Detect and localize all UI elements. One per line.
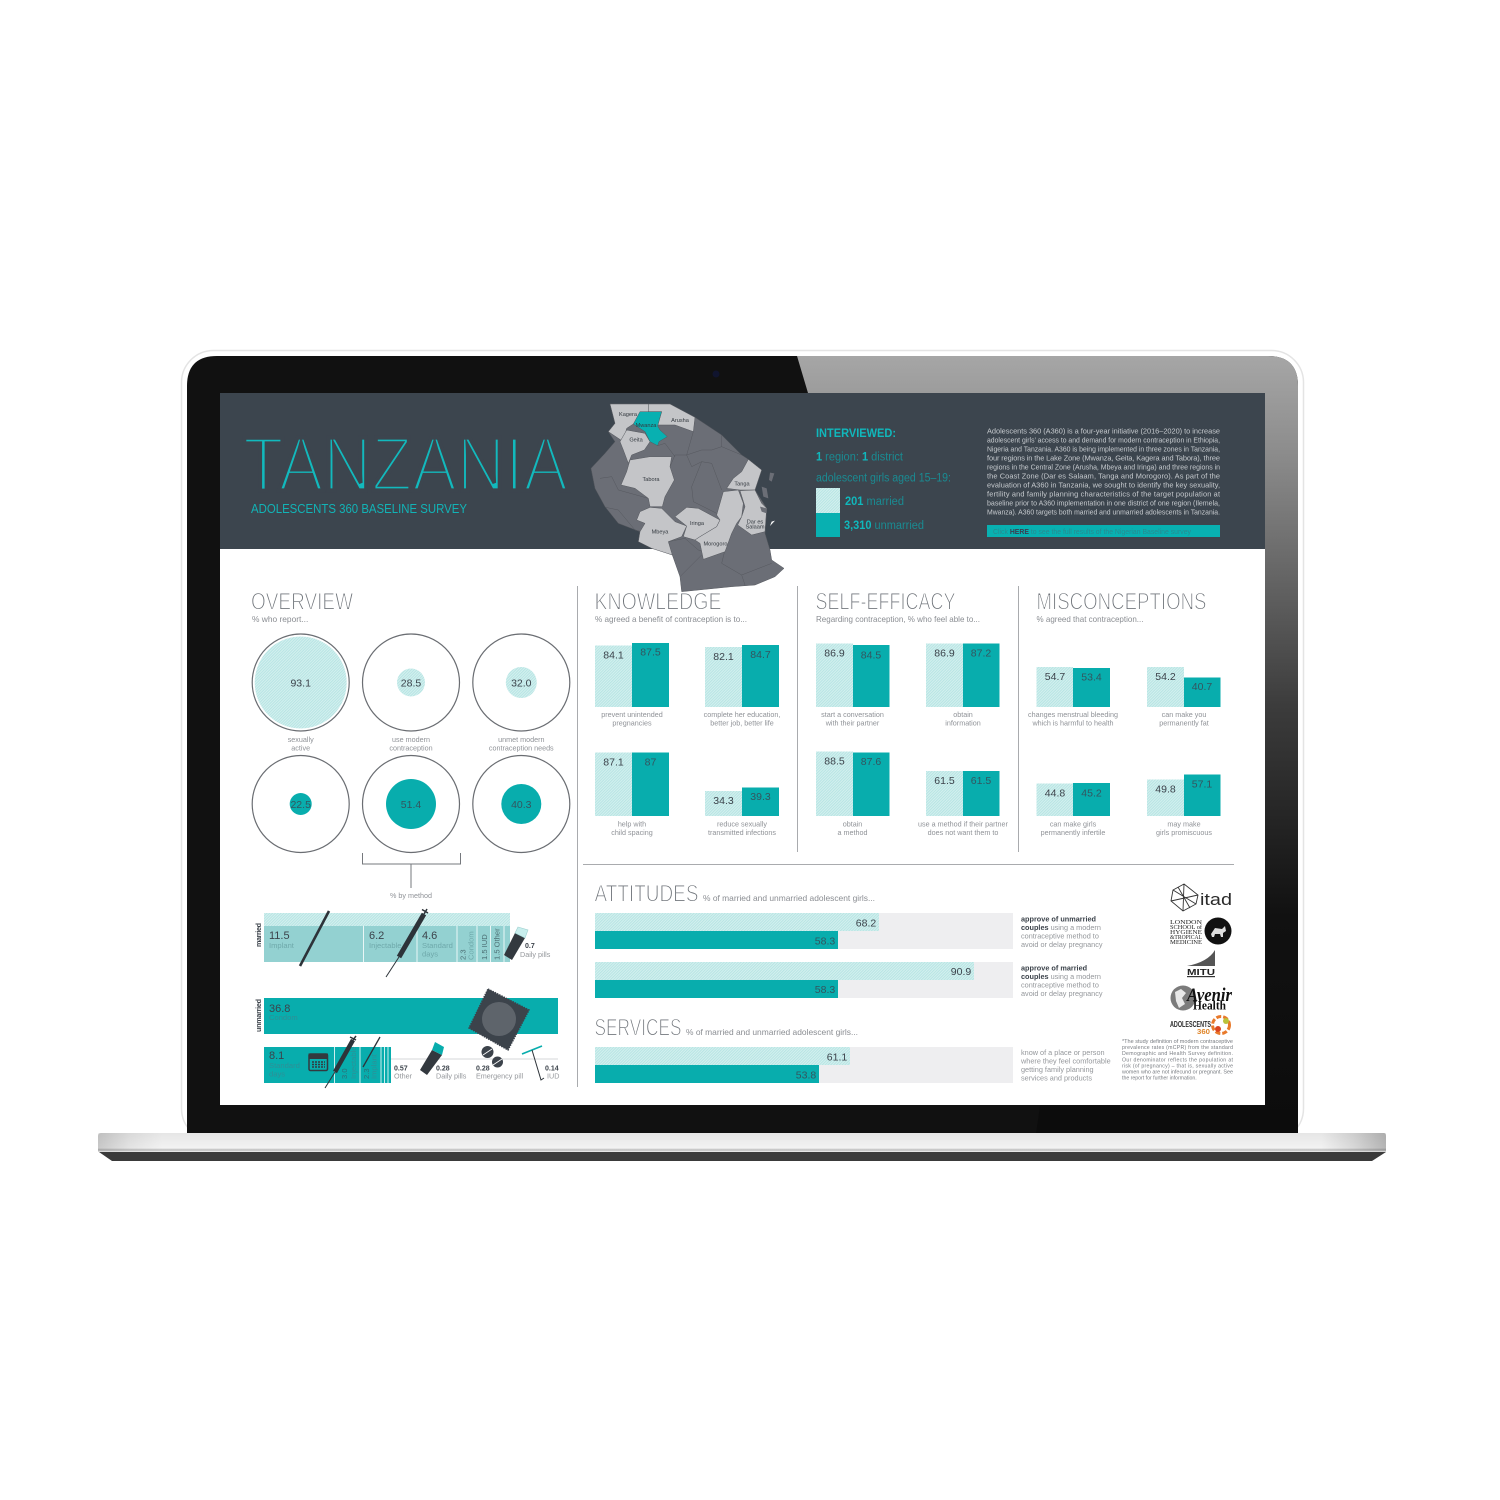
- unmarried swatch: [816, 513, 840, 537]
- logo: Avenir Health: Health: [1193, 998, 1226, 1012]
- laptop lid frame: [182, 350, 1304, 1140]
- map regions: [591, 404, 784, 592]
- map labels: Salaam: [746, 524, 765, 530]
- icon: pill pack: [504, 927, 528, 960]
- region and district count: 1 region: 1 district: [816, 452, 904, 464]
- icon: syringe: [386, 909, 428, 977]
- overview subheading: % who report...: [252, 614, 308, 624]
- chart: child spacing: 87: [645, 756, 656, 768]
- condom value: [269, 1003, 298, 1022]
- intro paragraph: baseline prior to A360 implementation in one district of one region (Ilemela,: [987, 498, 1220, 508]
- segment: injectable: Injectable: [349, 1046, 358, 1079]
- segment: standard days: 4.6: [422, 930, 437, 942]
- intro paragraph: four regions in the Lake Zone (Mwanza, Geita, Kagera and Tabora), three: [987, 454, 1220, 462]
- attitudes subheading: % of married and unmarried adolescent girls...: [703, 893, 875, 903]
- intro paragraph: adolescent girls’ access to and demand for modern contraception in Ethiopia,: [987, 436, 1220, 444]
- icon: emergency pills: [482, 1046, 503, 1068]
- text: know a place: where they feel comfortable: [1020, 1056, 1111, 1066]
- chart: prevent unintended pregnancies: 87.5: [640, 646, 661, 658]
- intro paragraph: Mwanza). A360 targets both married and unmarried adolescents in Tanzania.: [987, 508, 1220, 516]
- knowledge heading: KNOWLEDGE: [594, 588, 722, 616]
- panel: misconceptions: [1028, 588, 1220, 837]
- circle: sexually active: active: [291, 744, 310, 752]
- region Kagera: [608, 404, 648, 442]
- icon: implant rod: [300, 911, 329, 966]
- self-efficacy heading: SELF-EFFICACY: [816, 588, 956, 616]
- logo: Adolescents 360: 360: [1197, 1029, 1210, 1036]
- chart: obtain information: 86.9: [934, 648, 955, 660]
- map labels: Dar es: [747, 520, 763, 526]
- country silhouette: [591, 404, 784, 592]
- region Tabora: [621, 457, 674, 507]
- chart: use a method: [918, 771, 1009, 837]
- report link button: Click HERE to see the full results of the Nigerian Baseline survey: [993, 527, 1191, 536]
- logo: Adolescents 360: [1170, 1016, 1230, 1036]
- chart: permanently fat: [1147, 667, 1220, 728]
- screen background: [220, 549, 1265, 1105]
- text: approve of married: approve of married: [1021, 964, 1087, 972]
- webcam: [712, 370, 720, 378]
- icon: IUD: [522, 1046, 544, 1080]
- married count: 201 married: [845, 496, 904, 508]
- chart: promiscuous: may make: [1167, 820, 1201, 828]
- text: approve of married: avoid or delay pregnancy: [1021, 989, 1103, 998]
- chart: start a conversation: 86.9: [824, 648, 845, 660]
- label: emergency pill: [476, 1066, 524, 1080]
- label: daily pills: [520, 943, 551, 959]
- intro paragraph: the Coast Zone (Dar es Salaam, Tanga and Morogoro). As part of the: [987, 472, 1220, 480]
- chart: reduce STIs: transmitted infections: [708, 828, 776, 837]
- label: other: [394, 1066, 413, 1080]
- region Mwanza: [633, 412, 667, 446]
- chart: approve of married couples: [595, 962, 1013, 998]
- intro paragraph: regions in the Central Zone (Arusha, Mbeya and Iringa) and three regions in: [987, 462, 1220, 472]
- chart: approve of unmarried couples: [595, 913, 1013, 949]
- logo: MITU: MITU: [1187, 968, 1215, 977]
- region Iringa: [675, 507, 720, 540]
- segment: implant: [362, 1053, 378, 1079]
- map labels: Arusha: [671, 418, 690, 424]
- chart: approve of unmarried couples: 58.3: [815, 936, 835, 948]
- chart: reduce STIs: reduce sexually: [717, 820, 767, 828]
- chart: complete education: [704, 645, 780, 728]
- text: approve of unmarried: approve of unmarried: [1021, 914, 1096, 924]
- laptop: [98, 350, 1386, 1161]
- chart: obtain information: obtain: [953, 710, 973, 719]
- overview heading: OVERVIEW: [251, 588, 353, 616]
- married solid bar: [264, 926, 510, 962]
- circle: unmet need married: 32.0: [511, 678, 532, 690]
- chart: permanently fat: can make you: [1162, 710, 1206, 719]
- footnote: women who are not infecund or pregnant. See: [1122, 1070, 1233, 1076]
- footnote: [1122, 1039, 1234, 1082]
- bracket: by method: [362, 853, 460, 900]
- age group: adolescent girls aged 15–19:: [816, 472, 951, 484]
- map labels: Mbeya: [652, 530, 669, 536]
- chart: menstrual bleeding: which is harmful to health: [1031, 718, 1114, 728]
- segment: injectable: 6.2: [369, 930, 384, 942]
- panel: attitudes: [594, 880, 1103, 998]
- chart: prevent unintended pregnancies: pregnancies: [612, 718, 652, 728]
- chart: menstrual bleeding: [1028, 667, 1118, 728]
- label: other: Other: [394, 1072, 413, 1080]
- married hatch strip: [264, 913, 510, 926]
- base silver top: [98, 1133, 1386, 1152]
- chart: obtain a method: 88.5: [824, 756, 845, 768]
- chart: use a method: does not want them to: [928, 828, 998, 837]
- intro paragraph: Adolescents 360 (A360) is a four-year initiative (2016–2020) to increase: [987, 426, 1220, 436]
- logo: London School of Hygiene and Tropical Medicine: &TROPICAL: [1170, 934, 1202, 941]
- chart: use a method: 61.5: [971, 775, 991, 787]
- logo: Avenir Health: [1170, 985, 1233, 1012]
- chart: permanently infertile: 44.8: [1045, 788, 1065, 800]
- chart: approve of unmarried couples: 68.2: [856, 918, 876, 930]
- laptop black bezel: [187, 356, 1298, 1133]
- segment: IUD: 1.5 IUD: [480, 934, 489, 960]
- region Geita: [620, 430, 650, 463]
- chart: know a place: [595, 1047, 1013, 1083]
- chart: obtain a method: 87.6: [861, 756, 881, 768]
- self-efficacy subheading: Regarding contraception, % who feel able to...: [816, 614, 980, 624]
- subtitle: ADOLESCENTS 360 BASELINE SURVEY: [251, 502, 468, 516]
- knowledge subheading: % agreed a benefit of contraception is to...: [595, 614, 747, 624]
- interviewed heading: INTERVIEWED:: [816, 428, 896, 440]
- label: other: 0.57: [394, 1066, 408, 1072]
- segment: condom: 2.3: [458, 949, 468, 960]
- chart: complete education: better job, better life: [710, 718, 774, 728]
- circle: use modern contraception married: [362, 634, 460, 752]
- text: approve of married: couples using a modern: [1021, 972, 1101, 981]
- text: approve of unmarried: avoid or delay pregnancy: [1021, 940, 1103, 949]
- map labels: Tabora: [642, 477, 660, 483]
- chart: know a place: 61.1: [827, 1052, 847, 1064]
- label: daily pills: Daily pills: [520, 950, 551, 959]
- chart: obtain a method: obtain: [843, 820, 862, 828]
- icon: implant rod: [363, 1037, 380, 1067]
- panel: services: [594, 1014, 1111, 1083]
- region Dar es Salaam: [738, 490, 767, 535]
- circle: sexually active: sexually: [288, 735, 314, 744]
- chart: promiscuous: [1147, 774, 1220, 837]
- label: IUD: [545, 1066, 559, 1080]
- segment: implant: 2.3: [362, 1068, 371, 1079]
- chart: unmarried by method: [254, 989, 559, 1088]
- chart: reduce STIs: 34.3: [713, 795, 734, 807]
- label: daily pills: [436, 1066, 467, 1080]
- footnote: Demographic and Health Survey definition.: [1122, 1051, 1233, 1057]
- logo: itad: itad: [1200, 890, 1232, 909]
- logo: Adolescents 360: ADOLESCENTS: [1170, 1019, 1211, 1029]
- services heading: SERVICES: [594, 1014, 682, 1042]
- chart: promiscuous: girls promiscuous: [1156, 828, 1212, 837]
- islands: [760, 473, 774, 513]
- circle: sexually active: 93.1: [290, 678, 311, 690]
- segment: standard days: 8.1: [269, 1050, 284, 1062]
- text: approve of married: contraceptive method to: [1021, 980, 1099, 990]
- chart: obtain a method: [816, 752, 890, 837]
- segment: other: 1.5 Other: [492, 928, 502, 960]
- title: TANZANIA: [243, 422, 569, 508]
- interviewed block: [816, 428, 951, 537]
- chart: obtain information: [926, 644, 1000, 728]
- segment: implant: 11.5: [269, 930, 290, 942]
- chart: approve of married couples: 58.3: [815, 984, 835, 996]
- married swatch: [816, 488, 840, 513]
- map labels: Kagera: [619, 412, 638, 418]
- condom bar: [264, 998, 558, 1034]
- panel: overview: [251, 588, 570, 1088]
- chart: know a place: 53.8: [796, 1070, 816, 1082]
- text: know a place: know of a place or person: [1021, 1048, 1105, 1057]
- chart: child spacing: [595, 752, 669, 837]
- chart: permanently fat: 54.2: [1155, 671, 1176, 683]
- text: approve of married: [1021, 964, 1103, 998]
- logo: London School of Hygiene and Tropical Medicine: SCHOOL of: [1170, 924, 1203, 931]
- misconceptions heading: MISCONCEPTIONS: [1036, 588, 1206, 616]
- chart: complete education: complete her education,: [704, 710, 780, 719]
- icon: calendar: [309, 1054, 328, 1070]
- logo: London School of Hygiene and Tropical Medicine: MEDICINE: [1170, 939, 1202, 946]
- segment: injectable: Injectable: [369, 941, 402, 950]
- chart: married by method: [254, 909, 551, 977]
- chart: obtain information: information: [945, 718, 981, 728]
- segment: injectable: 3.0: [340, 1068, 349, 1079]
- chart: prevent unintended pregnancies: [595, 643, 669, 728]
- logo: London School of Hygiene and Tropical Medicine: LONDON: [1170, 919, 1202, 926]
- region Mbeya: [637, 507, 687, 555]
- panel: knowledge: [594, 588, 780, 837]
- icon: condom wrapper: [469, 989, 529, 1050]
- icon: syringe: [325, 1036, 356, 1088]
- chart: child spacing: help with: [618, 820, 646, 828]
- circle: sexually active unmarried: 22.5: [290, 799, 311, 811]
- footnote: risk (of pregnancy) – that is, sexually active: [1122, 1063, 1233, 1069]
- chart: reduce STIs: [705, 788, 779, 837]
- label: emergency pill: 0.28: [476, 1066, 490, 1072]
- chart: complete education: 82.1: [713, 651, 734, 663]
- icon: pill pack: [420, 1042, 444, 1075]
- attitudes heading: ATTITUDES: [594, 880, 698, 908]
- segment: standard days: Standard: [269, 1061, 300, 1070]
- logo: Avenir Health: Avenir: [1186, 985, 1233, 1006]
- footnote: the report for further information.: [1122, 1076, 1197, 1082]
- services subheading: % of married and unmarried adolescent girls...: [686, 1027, 858, 1037]
- circle: sexually active unmarried: [252, 756, 349, 852]
- chart: use a method: 61.5: [934, 775, 955, 787]
- chart: permanently infertile: permanently infertile: [1041, 828, 1105, 837]
- label: daily pills: Daily pills: [436, 1072, 467, 1080]
- circle: unmet need unmarried: 40.3: [511, 799, 532, 811]
- dark region borders: [600, 432, 772, 585]
- logo: itad: [1171, 884, 1232, 911]
- chart: promiscuous: 49.8: [1155, 784, 1176, 796]
- segment: condom: [458, 931, 476, 960]
- chart: start a conversation: with their partner: [825, 718, 880, 728]
- logo: London School of Hygiene and Tropical Medicine: HYGIENE: [1170, 929, 1202, 936]
- segment: standard days: days: [422, 950, 438, 958]
- base underside: [99, 1152, 1386, 1161]
- circle: unmet need married: [473, 634, 570, 752]
- circle: unmet need married: unmet modern: [498, 735, 544, 744]
- chart: permanently fat: 40.7: [1192, 681, 1212, 693]
- text: approve of unmarried: [1021, 914, 1103, 949]
- label: daily pills: 0.28: [436, 1066, 450, 1072]
- text: know a place: services and products: [1021, 1074, 1092, 1082]
- chart: menstrual bleeding: 53.4: [1081, 672, 1102, 684]
- intro paragraph: [987, 426, 1220, 516]
- segment: injectable: [369, 930, 402, 950]
- married label: married: [254, 923, 263, 947]
- map of Tanzania: [591, 404, 784, 592]
- segment: standard days: [422, 930, 453, 958]
- condom value: 36.8: [269, 1003, 290, 1015]
- text: know a place: getting family planning: [1021, 1065, 1094, 1074]
- circle: use modern contraception unmarried: [362, 756, 460, 852]
- text: approve of unmarried: couples using a modern: [1021, 923, 1101, 932]
- chart: permanently infertile: can make girls: [1050, 820, 1097, 828]
- panel: self-efficacy: [816, 588, 1009, 837]
- chart: complete education: 84.7: [750, 649, 771, 661]
- logo: MITU: [1187, 950, 1215, 977]
- segment: standard days: Standard: [422, 941, 453, 950]
- region Morogoro: [695, 490, 743, 559]
- chart: reduce STIs: 39.3: [750, 791, 771, 803]
- laptop base: [98, 1133, 1386, 1161]
- chart: promiscuous: 57.1: [1192, 778, 1212, 790]
- segment: implant: Implant: [269, 941, 295, 950]
- chart: menstrual bleeding: changes menstrual bleeding: [1028, 710, 1118, 719]
- map labels: Geita: [629, 438, 644, 444]
- lower bar: [264, 1047, 391, 1083]
- chart: prevent unintended pregnancies: prevent unintended: [601, 710, 663, 719]
- label: emergency pill: Emergency pill: [476, 1072, 524, 1080]
- segment: implant: Implant: [370, 1053, 378, 1079]
- chart: use a method: use a method if their partner: [918, 820, 1009, 828]
- intro paragraph: fertility and family planning characteristics of the target population at: [987, 490, 1220, 498]
- text: approve of unmarried: contraceptive method to: [1021, 932, 1099, 940]
- circle: unmet need married: contraception needs: [489, 744, 554, 752]
- circle: sexually active: [252, 634, 349, 752]
- segment: injectable: [340, 1046, 358, 1079]
- unmarried label: unmarried: [254, 999, 263, 1032]
- region Arusha: [648, 404, 695, 432]
- chart: obtain information: 87.2: [971, 648, 991, 660]
- circle: use modern contraception married: 28.5: [401, 678, 421, 690]
- region Tanga: [727, 459, 762, 490]
- chart: permanently fat: permanently fat: [1159, 718, 1209, 728]
- chart: permanently infertile: 45.2: [1081, 788, 1102, 800]
- footnote: prevalence rates (mCPR) from the standard: [1122, 1045, 1233, 1051]
- circle: use modern contraception married: use modern: [392, 735, 430, 744]
- segment: standard days: days: [269, 1070, 285, 1078]
- map labels: Iringa: [690, 521, 705, 527]
- header band: [220, 393, 1265, 549]
- footnote: *The study definition of modern contraceptive: [1122, 1039, 1233, 1045]
- logo: London School of Hygiene and Tropical Medicine: [1170, 918, 1232, 946]
- chart: start a conversation: [816, 644, 890, 728]
- bracket: by method: % by method: [390, 891, 432, 900]
- condom value: Condom: [269, 1013, 298, 1022]
- map labels: Tanga: [734, 482, 751, 488]
- segment: condom: Condom: [466, 931, 476, 960]
- intro paragraph: evaluation of A360 in Tanzania, we sought to identify the key sexuality,: [987, 480, 1220, 490]
- unmarried count: 3,310 unmarried: [844, 520, 924, 532]
- map labels: Morogoro: [704, 542, 727, 548]
- chart: start a conversation: start a conversation: [821, 710, 884, 719]
- base shading: [98, 1133, 1386, 1152]
- chart: child spacing: 87.1: [603, 756, 624, 768]
- intro paragraph: Nigeria and Tanzania. A360 is being implemented in three zones in Tanzania,: [987, 444, 1220, 454]
- misconceptions subheading: % agreed that contraception...: [1036, 614, 1144, 624]
- segment: implant: [269, 930, 295, 950]
- report link button: [987, 525, 1220, 537]
- segment: standard days: [269, 1050, 300, 1078]
- chart: start a conversation: 84.5: [861, 650, 881, 662]
- label: IUD: IUD: [547, 1072, 559, 1080]
- chart: menstrual bleeding: 54.7: [1045, 671, 1065, 683]
- circle: use modern contraception married: contraception: [389, 744, 433, 752]
- chart: permanently infertile: [1036, 783, 1110, 837]
- chart: child spacing: child spacing: [611, 828, 653, 837]
- label: IUD: 0.14: [545, 1066, 559, 1072]
- map labels: [619, 412, 765, 548]
- text: know a place: [1020, 1048, 1111, 1082]
- label: daily pills: 0.7: [525, 943, 535, 950]
- chart: approve of married couples: 90.9: [951, 966, 971, 978]
- chart: obtain a method: a method: [838, 828, 867, 837]
- chart: prevent unintended pregnancies: 84.1: [603, 650, 624, 662]
- circle: use modern contraception unmarried: 51.4: [401, 799, 421, 811]
- map labels: Mwanza: [636, 423, 657, 429]
- footnote: Our denominator reflects the population at: [1122, 1057, 1234, 1063]
- circle: unmet need unmarried: [473, 756, 570, 852]
- bezel right side glare: [797, 356, 1298, 1133]
